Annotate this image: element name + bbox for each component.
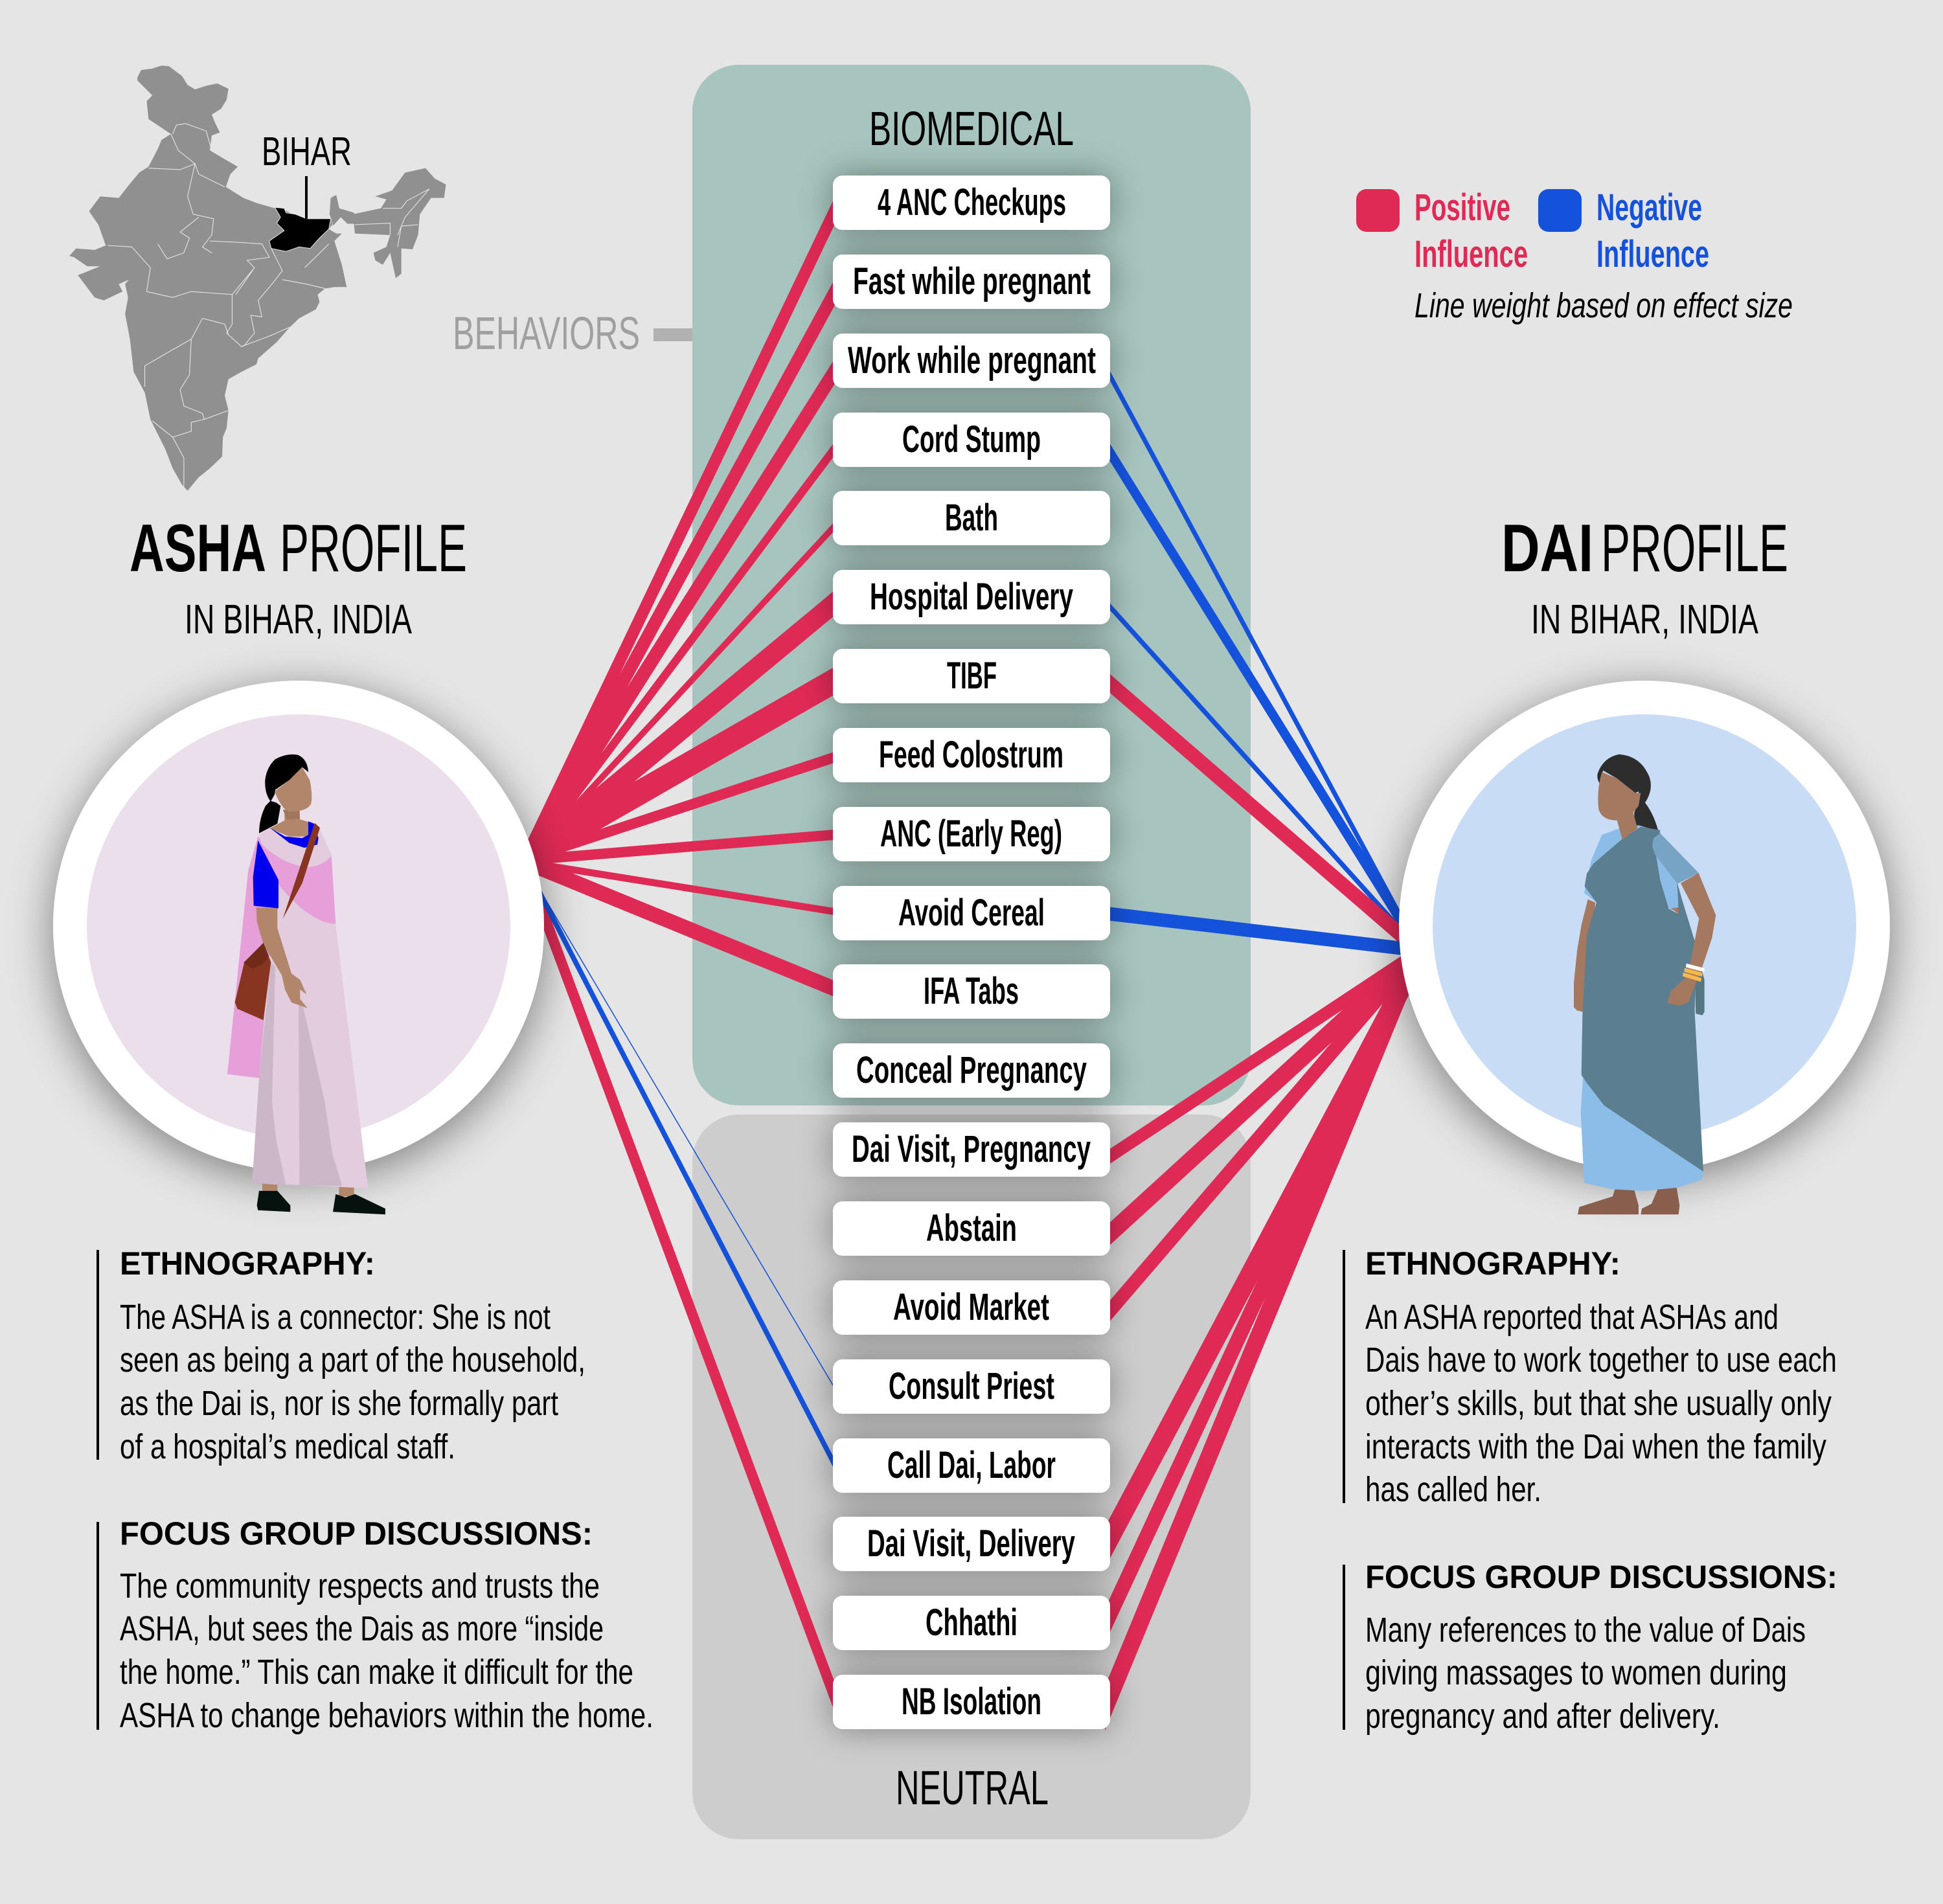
title: Dai profile: DAI [1501,511,1593,586]
behavior boxes: Dai Visit, Pregnancy [852,1128,1091,1170]
icon: Bihar state [269,207,331,251]
title: ASHA profile: PROFILE [280,511,467,586]
legend: Line weight based on effect size [1415,286,1793,325]
text block: Dai ethnography: other’s skills, but that she usually only [1365,1384,1832,1423]
behavior boxes: Bath [945,497,998,539]
behavior boxes: Feed Colostrum [879,734,1063,776]
behavior boxes: Hospital Delivery [870,576,1073,618]
text block: ASHA focus groups: ASHA, but sees the Dais as more “inside [120,1609,604,1648]
figure: ASHA woman [227,754,385,1214]
legend: Positive [1415,187,1510,229]
behavior boxes: IFA Tabs [924,970,1019,1012]
text block: Dai ethnography: An ASHA reported that ASHAs and [1365,1298,1778,1337]
text block: Dai ethnography [1343,1245,1837,1509]
circle: Dai portrait [1399,681,1890,1172]
text block: ASHA ethnography: seen as being a part of the household, [120,1341,585,1379]
title: Dai profile: PROFILE [1601,511,1788,586]
text block: ASHA ethnography [97,1245,585,1466]
influence lines: ASHA [518,182,842,1725]
text block: Dai ethnography: has called her. [1365,1470,1541,1509]
text block: Dai focus groups [1343,1559,1837,1736]
panel: biomedical [692,65,1251,1105]
legend: Negative [1596,187,1702,229]
text block: ASHA ethnography: The ASHA is a connector: She is not [120,1298,551,1337]
text block: Dai focus groups: Many references to the value of Dais [1365,1611,1806,1649]
title: ASHA profile [130,511,467,642]
heading: biomedical: BIOMEDICAL [869,102,1074,155]
behavior boxes: ANC (Early Reg) [880,813,1062,855]
influence lines: Dai [1101,354,1425,1730]
behavior boxes: Cord Stump [902,418,1041,460]
behavior boxes: Work while pregnant [848,339,1096,381]
behavior boxes [833,176,1110,1729]
text block: Dai ethnography: ETHNOGRAPHY: [1365,1245,1620,1282]
text block: Dai focus groups: giving massages to women during [1365,1653,1787,1692]
text block: Dai ethnography: interacts with the Dai when the family [1365,1427,1826,1466]
label: BIHAR: BIHAR [262,130,352,174]
behavior boxes: Fast while pregnant [853,260,1091,302]
behavior boxes: Consult Priest [889,1365,1054,1407]
text block: ASHA ethnography: as the Dai is, nor is she formally part [120,1384,558,1423]
behavior boxes: Call Dai, Labor [887,1444,1056,1486]
panel: neutral [692,1115,1251,1839]
text block: ASHA focus groups: FOCUS GROUP DISCUSSIONS: [120,1515,593,1552]
text block: ASHA ethnography: ETHNOGRAPHY: [120,1245,375,1282]
label: behaviors: BEHAVIORS [453,308,640,359]
behavior boxes: NB Isolation [902,1681,1041,1723]
legend [1356,187,1793,325]
text block: ASHA ethnography: of a hospital’s medical staff. [120,1427,455,1466]
pointer line to Bihar [305,176,308,219]
behavior boxes: Dai Visit, Delivery [867,1523,1075,1565]
figure: Dai woman [1574,754,1716,1214]
legend: Influence [1596,233,1709,275]
behavior boxes: Avoid Market [893,1286,1049,1328]
behavior boxes: Conceal Pregnancy [856,1049,1087,1091]
text block: ASHA focus groups: The community respects and trusts the [120,1567,600,1605]
text block: ASHA focus groups: ASHA to change behaviors within the home. [120,1696,653,1735]
legend: Influence [1415,233,1528,275]
title: ASHA profile: IN BIHAR, INDIA [185,596,412,642]
map of India with Bihar highlighted [69,65,446,491]
heading: neutral: NEUTRAL [896,1761,1049,1815]
title: Dai profile [1501,511,1788,642]
behavior boxes: Avoid Cereal [898,892,1045,934]
title: Dai profile: IN BIHAR, INDIA [1531,596,1758,642]
circle: ASHA portrait [53,681,544,1172]
text block: Dai focus groups: FOCUS GROUP DISCUSSIONS: [1365,1559,1837,1595]
text block: ASHA focus groups: the home.” This can make it difficult for the [120,1653,633,1692]
title: ASHA profile: ASHA [130,511,266,586]
behavior boxes: 4 ANC Checkups [878,181,1066,223]
text block: Dai focus groups: pregnancy and after delivery. [1365,1697,1720,1736]
behavior boxes: Chhathi [926,1602,1017,1644]
text block: ASHA focus groups [97,1515,653,1735]
behavior boxes: Abstain [926,1207,1017,1249]
behavior boxes: TIBF [947,655,997,697]
